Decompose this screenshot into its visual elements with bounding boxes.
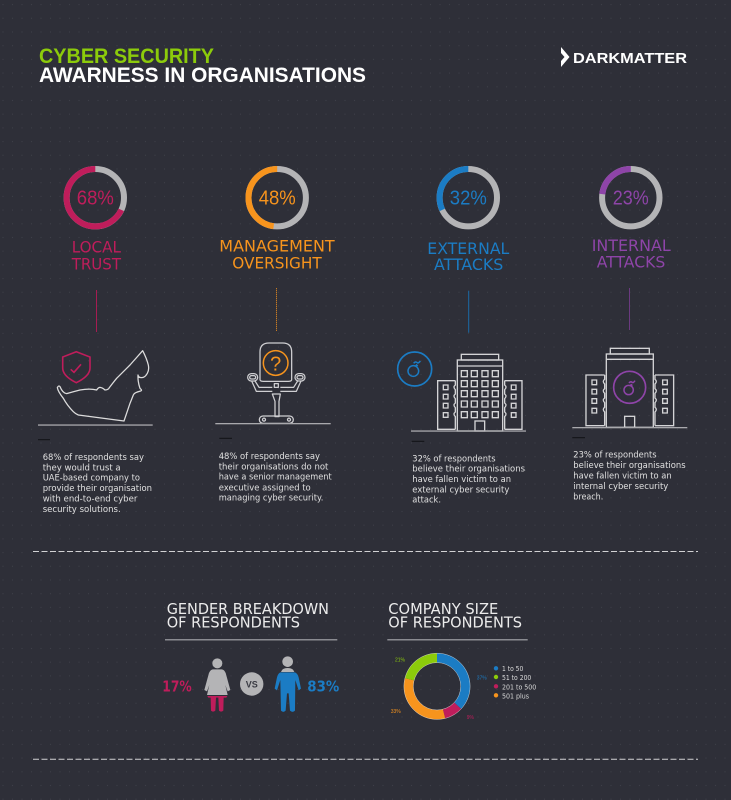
title: CYBER SECURITY [39,45,214,68]
icon: female figure [204,658,230,712]
heading: management oversight: MANAGEMENT [219,237,335,256]
icon: shield with check [63,352,90,383]
heading: external attacks: EXTERNAL [427,239,509,258]
text block: local trust: provide their organisation [43,484,152,494]
legend: 1 to 50 [502,665,523,673]
chart labels: 21% [395,658,406,664]
title [39,45,366,87]
title: AWARNESS IN ORGANISATIONS [39,64,366,87]
panel: company size [387,600,536,721]
heading: local trust: TRUST [71,254,121,273]
icon: office building with bomb [586,348,674,427]
chart labels: 9% [467,715,474,721]
legend: 51 to 200 [502,674,531,682]
chart labels: 33% [391,709,401,715]
icon: versus badge [240,672,263,696]
donut: 32%: 32% [450,187,487,209]
panel: external attacks [398,169,526,506]
text block: internal attacks: internal cyber security [573,482,668,492]
icon: male figure [275,656,301,712]
donut: 23% [602,169,660,226]
logo: DarkMatter: DARKMATTER [573,50,687,67]
text block: management oversight: executive assigned to [219,483,311,493]
text block: management oversight: 48% of respondents say [219,452,320,462]
text block: external attacks: attack. [412,496,441,506]
text block: external attacks: external cyber security [412,485,509,495]
text block: management oversight: their organisations do not [219,462,329,472]
heading: company size: COMPANY SIZE [388,600,498,618]
heading: company size [388,600,522,631]
heading: external attacks [427,239,509,274]
text block: external attacks [412,454,526,506]
heading: local trust: LOCAL [72,238,121,257]
panel: local trust [38,169,153,515]
text block: internal attacks: believe their organisations [573,461,686,471]
text block: local trust: 68% of respondents say [43,453,144,463]
panel: management oversight [215,169,335,504]
chart labels [391,658,487,721]
heading: gender breakdown: OF RESPONDENTS [167,613,300,631]
donut chart: company size [404,653,470,719]
panel: internal attacks [572,169,687,502]
text block: local trust: UAE-based company to [43,474,140,484]
donut: 23%: 23% [613,187,649,209]
text block: management oversight [219,452,332,504]
icon: UAE map [57,351,149,421]
icon: office building with bomb badge [398,352,522,431]
donut: 32% [440,169,497,226]
text block: external attacks: believe their organisations [412,465,526,475]
donut: 48%: 48% [259,187,296,209]
text block: external attacks: have fallen victim to an [412,475,511,485]
panel: gender breakdown [162,600,339,712]
text block: local trust: they would trust a [43,463,121,473]
legend [494,665,536,700]
heading: gender breakdown [167,600,329,631]
text block: local trust: with end-to-end cyber [43,494,138,504]
donut: 68%: 68% [77,187,114,209]
stat: 83% male: 83% [307,678,339,696]
text block: internal attacks: have fallen victim to an [573,471,672,481]
text block: local trust [43,453,152,515]
stat: 17% female: 17% [162,678,192,696]
heading: internal attacks [592,236,671,271]
icon: office chair with question mark: ? [270,353,281,375]
icon: office chair with question mark [248,343,305,423]
text block: management oversight: managing cyber security. [219,494,323,504]
text block: internal attacks [573,451,686,502]
text block: local trust: security solutions. [43,505,121,515]
text block: external attacks: 32% of respondents [412,454,496,464]
heading: management oversight: OVERSIGHT [232,253,322,272]
text block: management oversight: have a senior management [219,473,332,483]
text block: internal attacks: 23% of respondents [573,451,657,461]
heading: internal attacks: INTERNAL [592,236,671,255]
chart labels: 37% [477,675,487,681]
text block: internal attacks: breach. [573,492,603,502]
heading: management oversight [219,237,335,272]
legend: 201 to 500 [502,684,536,692]
donut: 68% [67,169,124,226]
heading: internal attacks: ATTACKS [597,252,665,271]
heading: company size: OF RESPONDENTS [388,613,522,631]
heading: gender breakdown: GENDER BREAKDOWN [167,600,329,618]
heading: external attacks: ATTACKS [434,255,503,274]
donut: 48% [249,169,306,226]
legend: 501 plus [502,692,529,700]
icon: versus badge: VS [246,679,258,689]
heading: local trust [71,238,121,273]
